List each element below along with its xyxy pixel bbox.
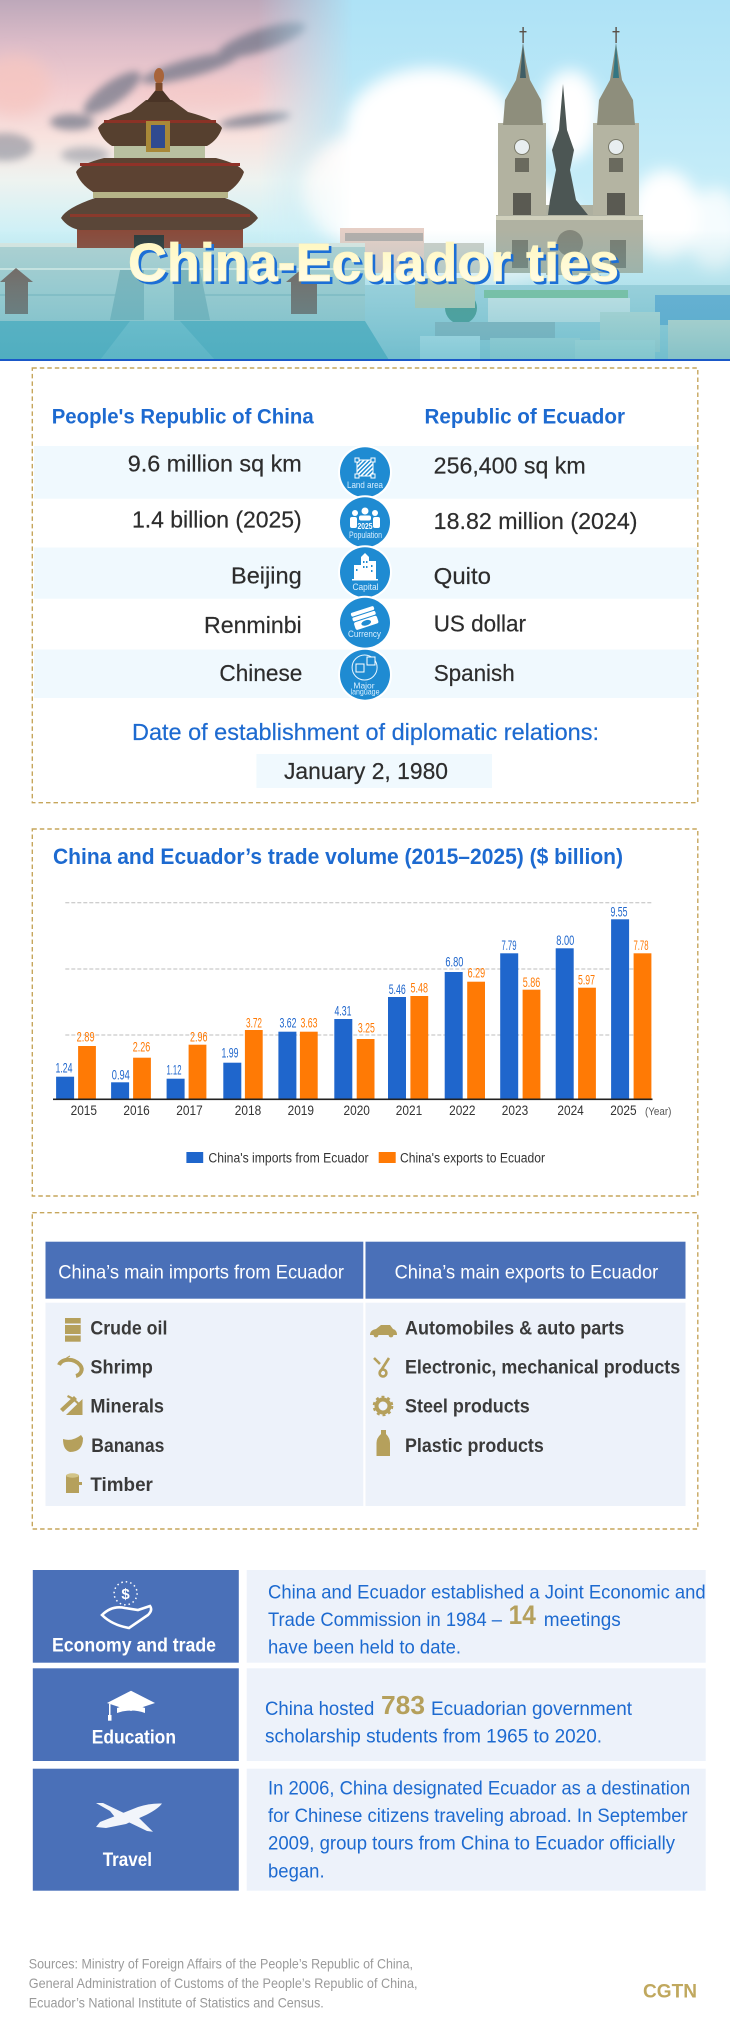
temple of heaven [61,68,258,249]
text block: education: scholarship students from 1965 to 2020. [265,1726,602,1748]
bar chart: 4.31 [334,1002,352,1018]
import items: Minerals [90,1396,164,1418]
bar chart: 5.97 [578,971,595,987]
hero divider [0,359,730,361]
Ecuador values: Quito [434,563,491,589]
export items [405,1317,680,1457]
icon: population: 2025 [358,522,373,531]
label: Travel [103,1849,152,1871]
bar chart: 7.79 [502,937,517,953]
panel: education [33,1668,239,1761]
legend: China's exports to Ecuador [400,1151,545,1166]
table header: exports [366,1242,686,1299]
bar chart: 1.12 [166,1062,182,1078]
export items: Automobiles & auto parts [405,1317,624,1339]
icon: oil barrel [65,1318,81,1342]
text block: travel: began. [268,1860,325,1882]
import items: Timber [90,1474,153,1496]
heading: China: People's Republic of China [52,405,314,428]
bar chart: 2017 [176,1102,203,1118]
town [365,278,730,360]
text block: economy and trade [247,1570,706,1663]
text block: economy and trade: China and Ecuador established a Joint Economic and [268,1581,706,1603]
bar chart: 6.29 [468,964,485,980]
bar chart: 2018 [235,1102,261,1118]
Ecuador values [434,452,638,686]
number: 14 meetings: 14 [509,1600,536,1630]
bar chart: 1.24 [56,1060,73,1076]
bar chart: 2021 [396,1102,422,1118]
icon: population: Population [349,530,382,540]
exports list [366,1303,686,1506]
huts [0,268,320,314]
cathedral [496,27,643,275]
date value box: January 2, 1980 [284,758,448,784]
chart title: China and Ecuador’s trade volume (2015–2025) ($ billion) [53,844,623,869]
text block: travel: for Chinese citizens traveling abroad. In September [268,1805,688,1827]
icon: bananas [63,1435,83,1452]
icon: airplane [96,1803,162,1832]
China values: 9.6 million sq km [128,451,302,477]
heading: Ecuador: Republic of Ecuador [424,405,625,428]
building: town behind terrace [340,228,484,273]
label: Education [92,1726,176,1748]
bar chart: 2020 [344,1102,370,1118]
panel: country comparison [32,368,698,803]
bar chart: 7.78 [634,937,649,953]
number: 783 students: 783 [381,1690,425,1720]
import items: Shrimp [90,1357,153,1379]
icon: car [370,1325,397,1337]
bar chart: 3.25 [358,1020,375,1036]
table header: imports: China’s main imports from Ecuador [58,1261,344,1283]
Ecuador values: 18.82 million (2024) [434,508,638,534]
panel: travel [33,1769,239,1891]
icon: capital [338,545,392,599]
icon: minerals [60,1395,82,1415]
export items: Steel products [405,1396,530,1418]
icon: major language: Major [353,680,375,690]
Ecuador values: Spanish [434,660,515,686]
bar chart: 2015 [71,1102,97,1118]
sources: General Administration of Customs of the People’s Republic of China, [29,1975,418,1991]
text block: economy and trade: Trade Commission in 1984 – [268,1609,502,1631]
text block: travel: In 2006, China designated Ecuador as a destination [268,1777,690,1799]
icon: population [338,495,392,549]
icon: money in hand [102,1582,151,1628]
title: China-Ecuador ties [128,233,619,293]
text block: education: China hosted [265,1698,374,1720]
heading: diplomatic relations date: Date of establishment of diplomatic relations: [132,719,599,745]
table header: exports: China’s main exports to Ecuador [395,1261,659,1283]
icon: mechanical arm [374,1358,389,1376]
ground [0,321,389,360]
imports list [46,1303,363,1506]
bar chart: 3.62 [280,1015,297,1031]
bar chart: 3.63 [300,1015,318,1031]
bar chart: 0.94 [112,1067,130,1083]
bar chart: 2025 [610,1102,637,1118]
bar chart: 3.72 [246,1015,262,1031]
label: Economy and trade [52,1635,216,1657]
table header: imports [46,1242,363,1299]
icon: currency [338,596,392,650]
row bands [34,446,697,698]
bar chart: 9.55 [610,903,628,919]
pink sunset sky [0,0,340,234]
bar chart: 5.46 [389,981,406,997]
text block: travel: 2009, group tours from China to Ecuador officially [268,1833,675,1855]
sources: Ecuador’s National Institute of Statistics and Census. [29,1994,324,2010]
China values: Chinese [219,660,302,686]
icon: major language [338,648,392,702]
text block: economy and trade: have been held to date. [268,1637,461,1659]
icon: money in hand: $ [121,1586,130,1603]
text block: education [247,1668,706,1761]
text block: travel [247,1769,706,1891]
bar chart: (Year) [645,1106,671,1118]
icon: land area [338,445,392,499]
text block: education: Ecuadorian government [431,1698,633,1720]
legend: China's imports from Ecuador [208,1151,369,1166]
bar chart [53,903,671,1118]
icon: plastic bottle [376,1430,390,1456]
icon: currency: Currency [348,629,381,640]
panel: economy and trade [33,1570,239,1663]
icon: land area: Land area [347,480,384,491]
icon: gear [374,1397,392,1415]
terrace [0,243,365,321]
Ecuador values: 256,400 sq km [434,452,586,478]
bar chart: 2024 [557,1102,584,1118]
legend [186,1151,545,1166]
hero image: Temple of Heaven and Quito basilica [0,0,730,360]
icon: major language: language [350,686,380,696]
import items: Bananas [91,1435,165,1457]
bar chart: 2019 [288,1102,314,1118]
logo: CGTN: CGTN [643,1981,697,2002]
icon: capital: Capital [352,582,378,593]
China values: Beijing [231,562,302,588]
bar chart: 1.99 [222,1045,239,1061]
bar chart: 2.96 [190,1029,208,1045]
China values: 1.4 billion (2025) [132,506,302,532]
import items [90,1317,167,1496]
date value box [256,754,492,788]
bar chart: 5.48 [410,980,428,996]
China values [128,451,302,686]
export items: Plastic products [405,1435,544,1457]
panel: trade volume chart [32,829,698,1196]
bar chart: 8.00 [556,932,574,948]
bar chart: 2.89 [77,1029,95,1045]
sources [29,1955,418,2010]
Ecuador values: US dollar [434,611,526,637]
icon: graduation cap [107,1691,155,1721]
export items: Electronic, mechanical products [405,1357,680,1379]
bar chart: 2022 [449,1102,476,1118]
white clouds [300,68,730,290]
China values: Renminbi [204,612,302,638]
bar chart: 5.86 [523,974,540,990]
bar chart: 2016 [123,1102,150,1118]
panel: main imports and exports [32,1213,698,1529]
bar chart: 2.26 [133,1039,150,1055]
text block: economy and trade: meetings [544,1609,621,1631]
bar chart: 6.80 [445,954,464,970]
icon: timber [66,1473,82,1493]
bar chart: 2023 [502,1102,528,1118]
icon: shrimp [59,1356,82,1376]
title: China-Ecuador ties [130,236,622,296]
sources: Sources: Ministry of Foreign Affairs of the People’s Republic of China, [29,1955,413,1971]
import items: Crude oil [90,1317,167,1339]
